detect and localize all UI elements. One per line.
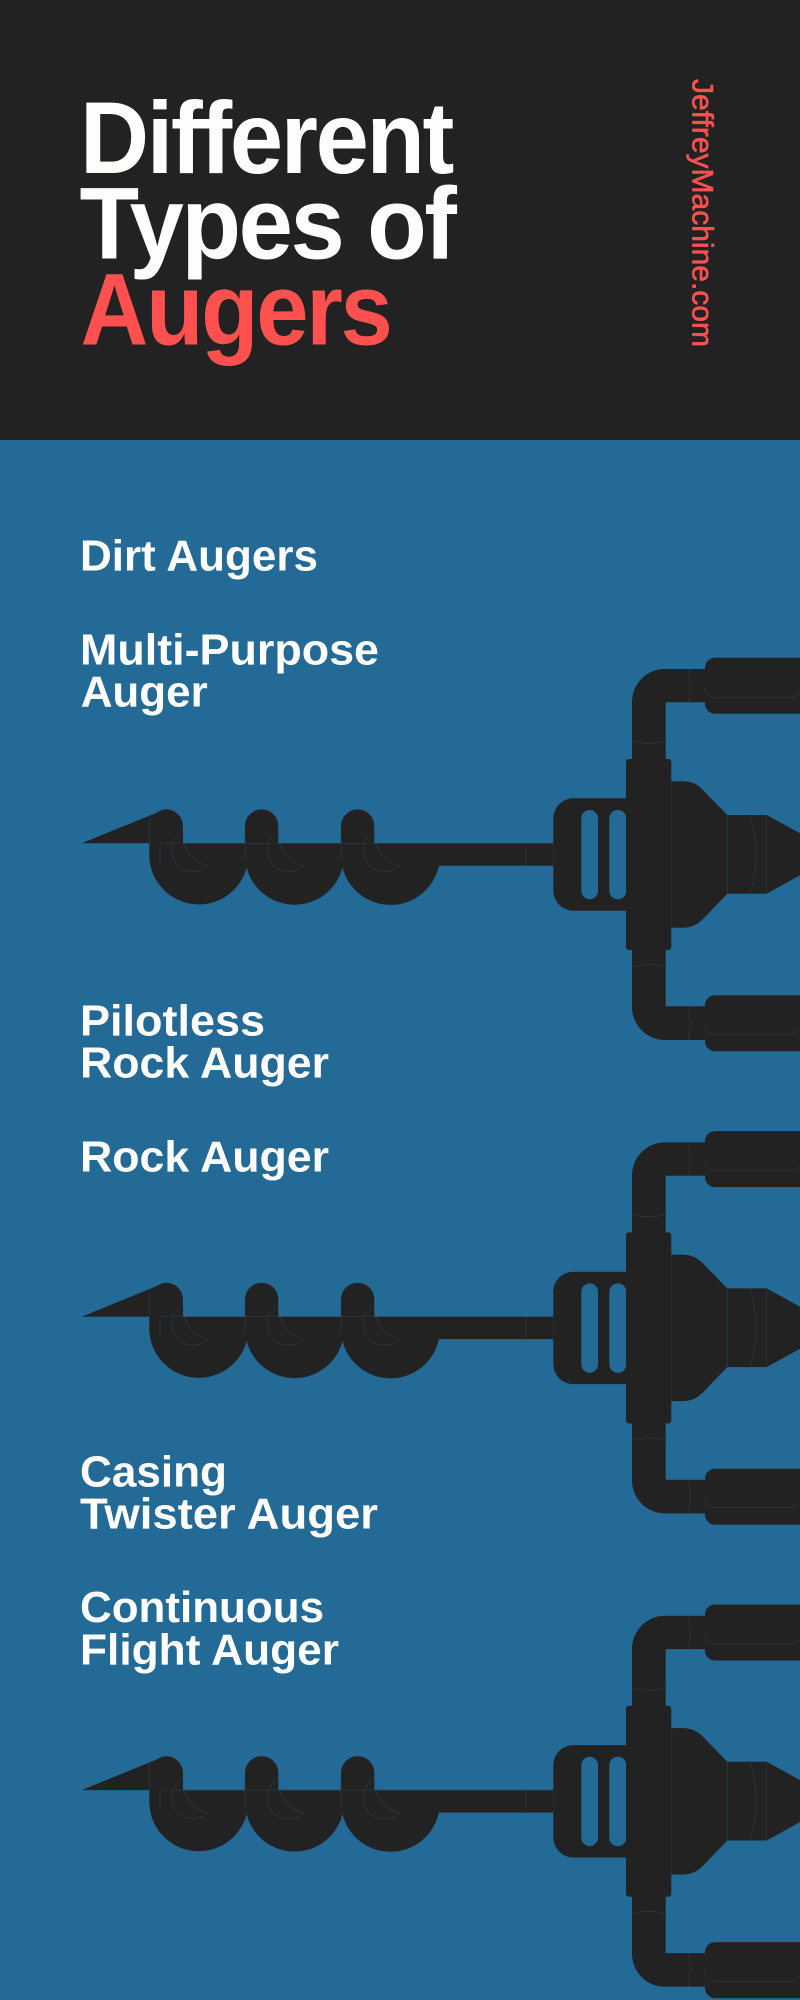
vented housing [553, 1745, 630, 1858]
auger illustration 3 [82, 1604, 800, 1998]
title [80, 81, 458, 367]
label: Rock Auger: Rock Auger [80, 1133, 329, 1182]
label: Pilotless Rock Auger: Rock Auger [80, 1039, 329, 1088]
motor body [671, 1254, 800, 1401]
title: Different [80, 81, 453, 195]
label: Multi-Purpose Auger: Multi-Purpose [80, 625, 379, 674]
label: Casing Twister Auger [80, 1448, 378, 1538]
label: Continuous Flight Auger [80, 1583, 339, 1674]
label: Pilotless Rock Auger [80, 996, 329, 1088]
vented housing [553, 1272, 630, 1384]
title: Augers [80, 253, 390, 367]
auger bit and shaft [82, 809, 553, 905]
motor body [671, 1728, 800, 1874]
label: Multi-Purpose Auger: Auger [81, 668, 208, 717]
bottom handle [632, 1422, 800, 1525]
auger bit and shaft [82, 1756, 553, 1852]
label: Casing Twister Auger: Casing [80, 1448, 227, 1497]
label: Continuous Flight Auger: Flight Auger [80, 1625, 339, 1674]
motor body [671, 781, 800, 928]
vented housing [553, 798, 630, 911]
bottom handle [632, 949, 800, 1051]
label: Continuous Flight Auger: Continuous [80, 1583, 324, 1632]
auger bit and shaft [82, 1283, 553, 1378]
top handle [632, 1131, 800, 1233]
title: Types of [80, 167, 458, 281]
label: Multi-Purpose Auger [80, 625, 379, 717]
label: Dirt Augers: Dirt Augers [80, 532, 318, 581]
center bar [626, 759, 671, 950]
center bar [626, 1706, 671, 1897]
header panel [0, 0, 800, 440]
auger illustration 2 [82, 1131, 800, 1525]
website label: JeffreyMachine.com [686, 79, 719, 347]
center bar [626, 1232, 671, 1423]
label: Pilotless Rock Auger: Pilotless [80, 996, 265, 1045]
top handle [632, 658, 800, 760]
top handle [632, 1604, 800, 1707]
auger illustration 1 [82, 658, 800, 1051]
bottom handle [632, 1896, 800, 1998]
label: Casing Twister Auger: Twister Auger [80, 1489, 378, 1538]
